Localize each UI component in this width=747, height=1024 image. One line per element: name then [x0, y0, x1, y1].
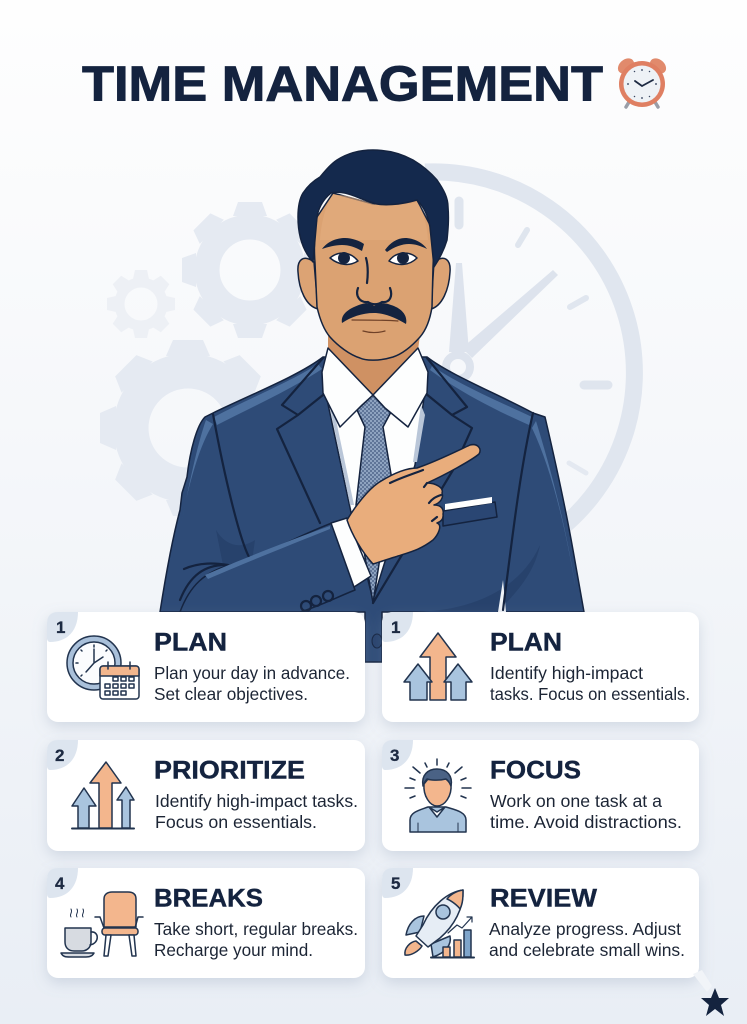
icon: rocket and chart [405, 890, 474, 958]
ears [298, 258, 450, 309]
eyebrows [322, 238, 427, 252]
description [155, 791, 358, 832]
sleeve [180, 523, 355, 612]
description: Identify high-impact [490, 663, 643, 683]
badge [47, 612, 78, 642]
card: 5 review [382, 868, 699, 978]
icon: coffee and chair [61, 892, 143, 957]
pocket and pocket square [443, 497, 497, 526]
card: duplicate plan [382, 612, 699, 722]
icon: alarm clock emoji [615, 55, 669, 107]
icon: focused person [405, 759, 471, 832]
badge [382, 612, 413, 642]
badge: 5 [391, 874, 400, 893]
description: Take short, regular breaks. [154, 919, 358, 939]
card: 4 breaks [47, 868, 365, 978]
icon: arrows [72, 762, 134, 828]
description: Work on one task at a [490, 791, 662, 811]
description: Identify high-impact tasks. [155, 791, 358, 811]
heading: REVIEW [490, 884, 597, 912]
hair [298, 150, 448, 267]
description [154, 663, 350, 704]
card: 3 focus [382, 740, 699, 851]
icon: arrows [404, 633, 472, 700]
description [154, 919, 358, 960]
heading: PLAN [154, 628, 227, 656]
card: 2 prioritize [47, 740, 365, 851]
badge: 1 [391, 618, 400, 637]
badge [382, 868, 413, 898]
heading: PLAN [490, 628, 562, 656]
eyes [330, 252, 417, 264]
suit jacket [160, 357, 584, 662]
tie [356, 395, 392, 603]
badge: 2 [55, 746, 64, 765]
description [489, 919, 685, 960]
right collar [373, 348, 428, 427]
heading: PRIORITIZE [154, 756, 305, 784]
suit shading [216, 530, 540, 612]
gear: medium [182, 202, 318, 338]
badge: 3 [390, 746, 399, 765]
shirt [325, 390, 425, 600]
gear: small [107, 270, 175, 338]
title: TIME MANAGEMENT [82, 58, 603, 112]
sleeve buttons [301, 591, 333, 611]
neck [328, 335, 420, 395]
right lapel lines [373, 358, 472, 603]
corner glint [693, 970, 712, 992]
description [490, 791, 682, 832]
description: time. Avoid distractions. [490, 812, 682, 832]
description: and celebrate small wins. [489, 940, 685, 960]
description: Focus on essentials. [155, 812, 317, 832]
face [314, 193, 433, 360]
description: Recharge your mind. [154, 940, 313, 960]
heading: FOCUS [490, 756, 581, 784]
moustache [342, 303, 406, 324]
background clock [425, 172, 634, 540]
icon: clock and calendar [67, 636, 139, 699]
gear: large [100, 340, 276, 516]
person [160, 150, 584, 662]
right notch [498, 580, 506, 612]
badge [382, 740, 413, 770]
forehead highlight [320, 195, 428, 240]
jacket button at gap [372, 634, 382, 648]
pointing hand [347, 445, 480, 564]
badge: 4 [55, 874, 65, 893]
description: Analyze progress. Adjust [489, 919, 681, 939]
shoulder highlights [180, 364, 576, 590]
seams [180, 413, 533, 610]
nose [357, 258, 391, 304]
icon: corner star [701, 988, 729, 1016]
left collar [322, 348, 373, 427]
description: Plan your day in advance. [154, 663, 350, 683]
description: tasks. Focus on essentials. [490, 684, 690, 704]
mouth [352, 320, 398, 332]
badge: 1 [56, 618, 65, 637]
background gears [100, 202, 318, 516]
badge [47, 868, 78, 898]
card: 1 plan [47, 612, 365, 722]
description [490, 663, 690, 704]
badge [47, 740, 78, 770]
description: Set clear objectives. [154, 684, 308, 704]
shirt cuff [331, 518, 371, 587]
left lapel lines [277, 358, 323, 523]
heading: BREAKS [154, 884, 263, 912]
